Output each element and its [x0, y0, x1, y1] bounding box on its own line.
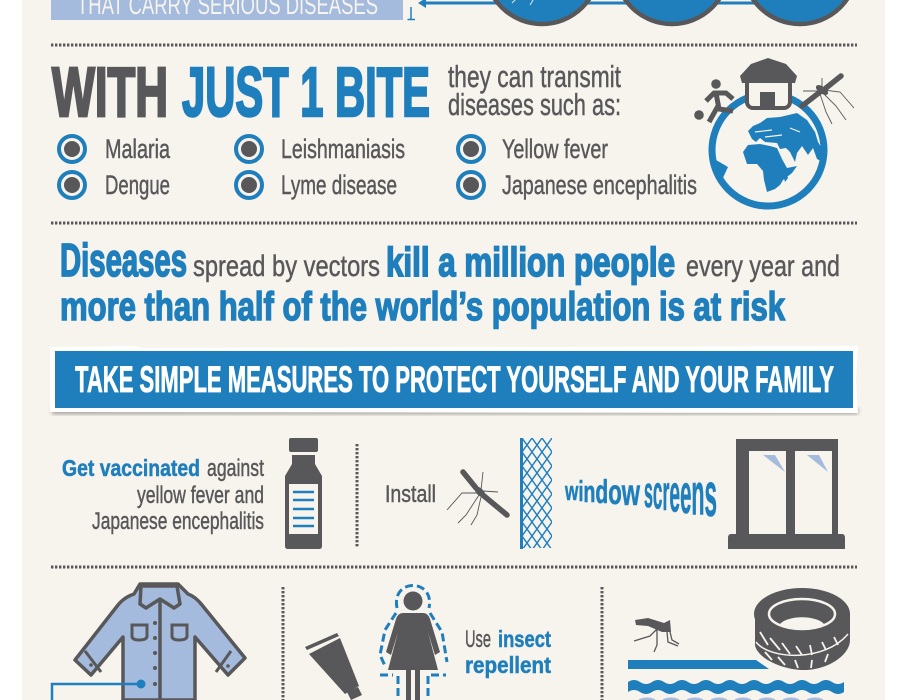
mosquito: [802, 76, 854, 124]
window screens label: s: [644, 468, 653, 517]
callout line from shirt: [52, 680, 146, 700]
icon: mosquito facing screen: [447, 472, 507, 525]
disease list: [59, 134, 697, 200]
top banner: diseases box: [51, 0, 403, 20]
top circles: [485, 0, 857, 24]
bullet: yellow fever: [458, 136, 484, 162]
icon: stagnant water: [628, 660, 844, 700]
person kicking ball: [694, 79, 733, 122]
icon: mesh screen: [520, 438, 552, 549]
use insect repellent label: insect: [498, 626, 551, 652]
bullet: malaria: [59, 136, 85, 162]
statistic text: kill a million people: [386, 239, 675, 285]
subheading: they can transmit: diseases such as:: [448, 87, 621, 122]
use insect repellent label: Use: [465, 626, 491, 653]
window screens label: n: [691, 462, 704, 528]
window screens label: e: [669, 464, 680, 524]
subheading: they can transmit: [448, 59, 621, 122]
arrow from circles to box: [408, 0, 770, 20]
vaccination text: yellow fever and: [137, 482, 264, 509]
label: dengue: Dengue: [105, 170, 170, 200]
statistic text: [60, 234, 840, 329]
label: malaria: Malaria: [105, 134, 171, 164]
label: yellow fever: Yellow fever: [502, 134, 608, 164]
icon: window: [728, 439, 845, 549]
install label: Install: [385, 481, 436, 508]
icon: repellent tube: [305, 633, 362, 700]
heading: with just 1 bite: [52, 53, 430, 131]
icon: woman with protective outline: [380, 586, 447, 700]
bullet: dengue: [59, 172, 85, 198]
statistic text: Diseases: [60, 234, 187, 286]
bullet: lyme disease: [236, 172, 262, 198]
bullet: leishmaniasis: [236, 136, 262, 162]
window screens label: [564, 461, 717, 530]
use insect repellent label: [465, 626, 551, 678]
heading: with just 1 bite: WITH: [52, 53, 168, 131]
icon: tire: [754, 588, 850, 670]
label: lyme disease: Lyme disease: [281, 170, 397, 200]
bullet: japanese encephalitis: [458, 172, 484, 198]
house: [740, 58, 797, 109]
icon: long-sleeved shirt: [75, 584, 245, 700]
window screens label: r: [662, 465, 669, 521]
statistic text: every year and: [686, 250, 840, 283]
text: s: [704, 461, 717, 530]
heading: with just 1 bite: JUST 1 BITE: [182, 53, 430, 131]
banner: take simple measures: [50, 346, 858, 414]
subheading: they can transmit: they can transmit: [448, 59, 621, 94]
window screens label: e: [680, 462, 691, 525]
vaccination text: [62, 455, 264, 535]
globe: [712, 94, 824, 206]
label: leishmaniasis: Leishmaniasis: [281, 134, 405, 164]
window screens label: w: [621, 472, 640, 513]
vaccination text: Get vaccinated: [62, 455, 200, 481]
label: japanese encephalitis: Japanese encephalitis: [502, 170, 697, 200]
window screens label: d: [595, 473, 608, 510]
statistic text: spread by vectors: [193, 250, 380, 283]
icon: mosquito above water: [634, 618, 679, 652]
icon: globe with house, person and mosquito: [694, 58, 854, 206]
icon: vaccine bottle: [285, 438, 322, 549]
vaccination text: against: [207, 455, 264, 482]
use insect repellent label: repellent: [465, 652, 551, 678]
vaccination text: Japanese encephalitis: [92, 508, 264, 535]
window screens label: w: [564, 476, 579, 506]
window screens label: n: [583, 474, 595, 509]
window screens label: i: [578, 476, 583, 508]
window screens label: c: [653, 466, 662, 518]
window screens label: o: [608, 473, 622, 512]
